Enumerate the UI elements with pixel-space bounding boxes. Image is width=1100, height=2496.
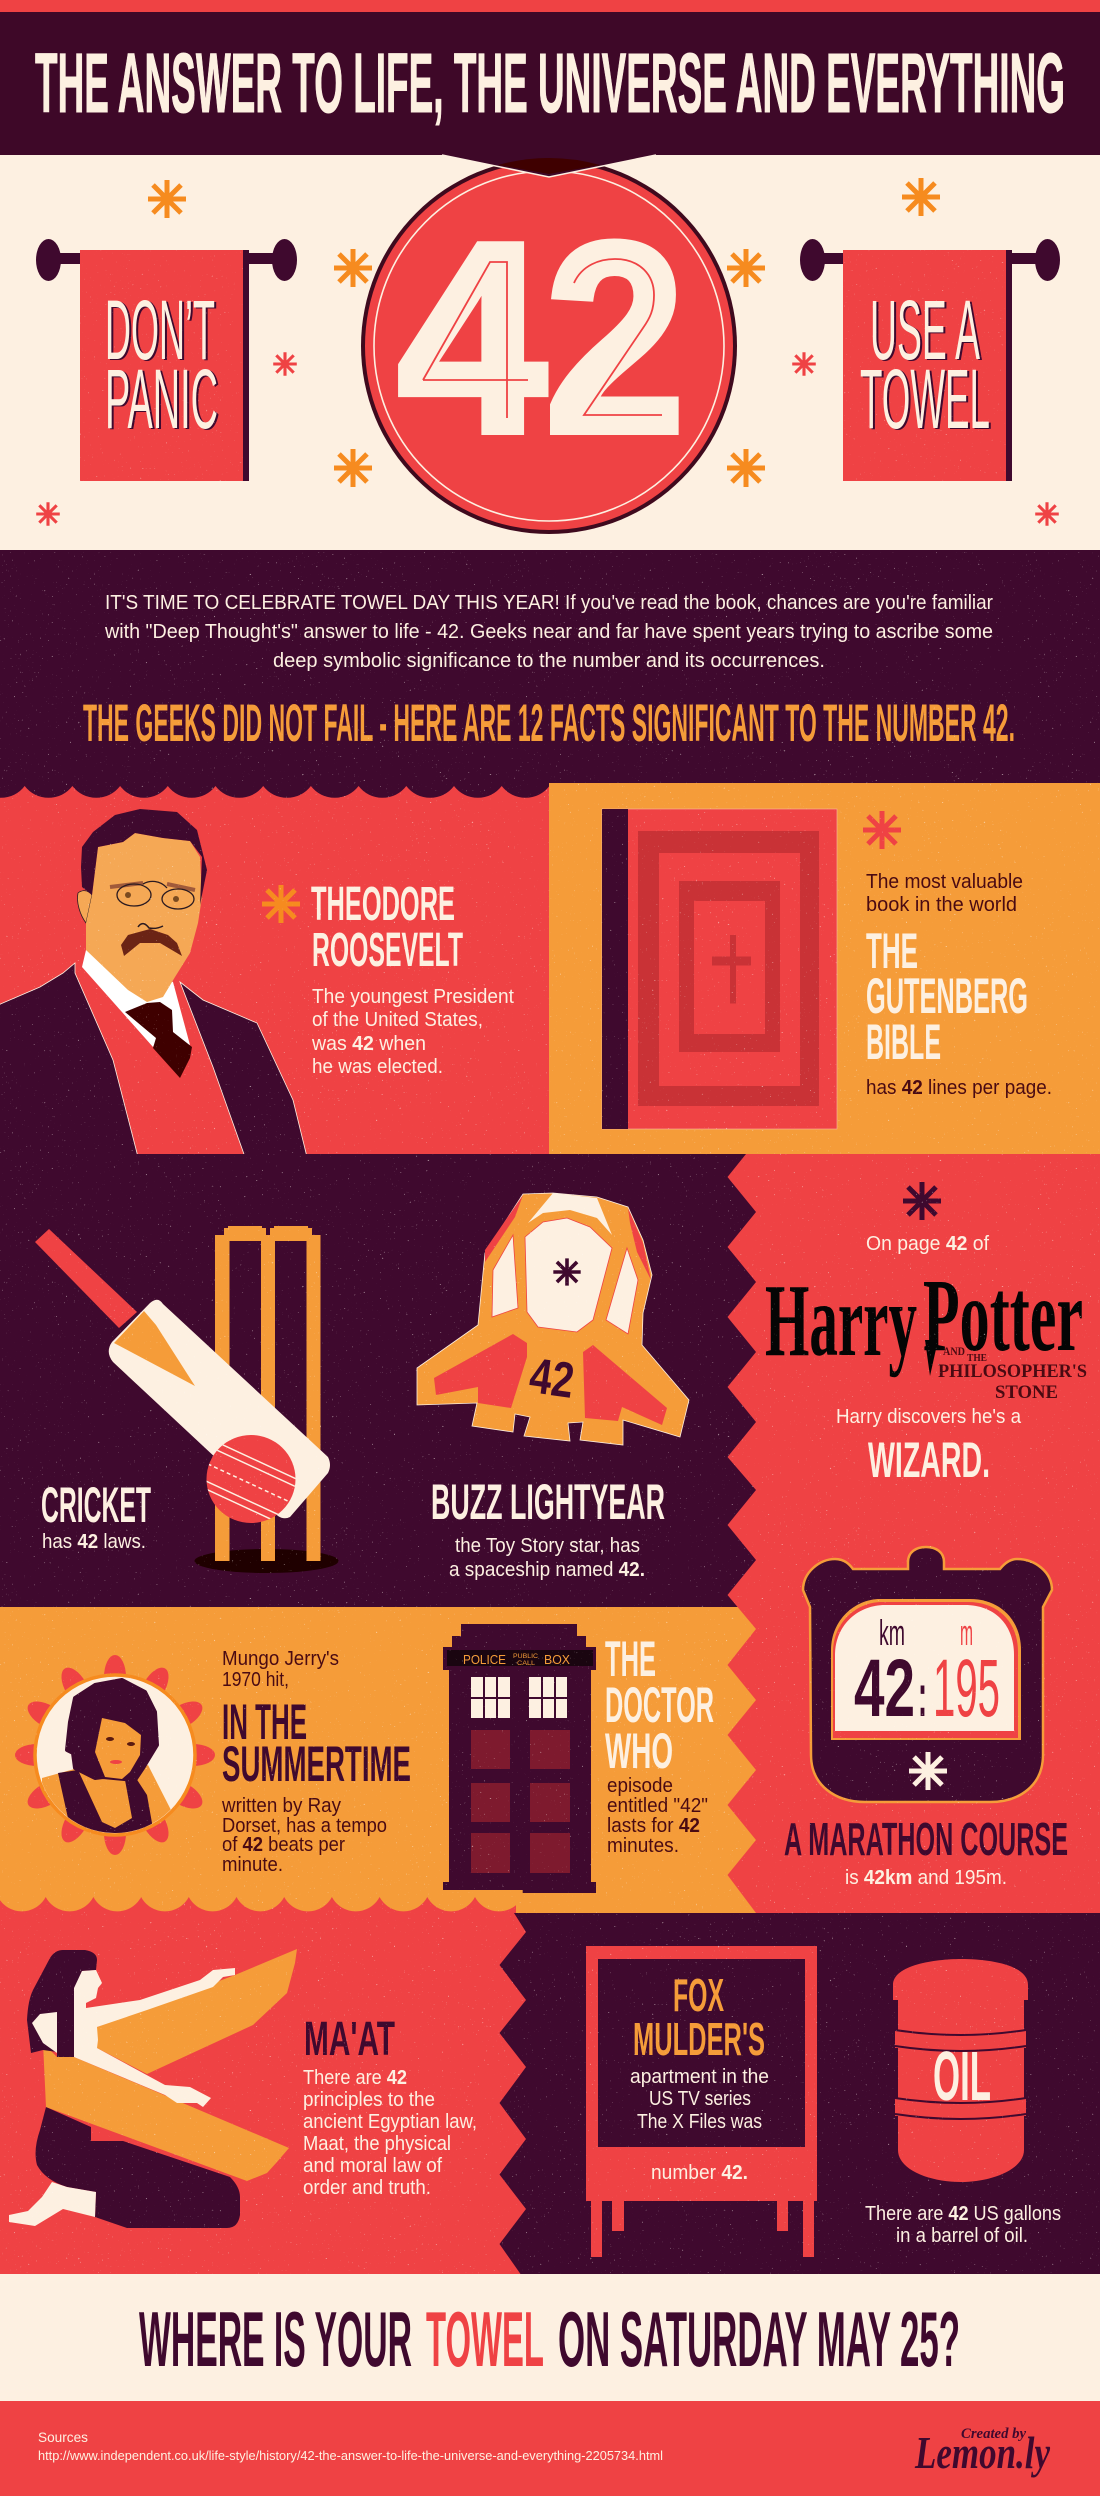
panel: orange band background [0, 1607, 800, 1913]
panel: maat background [0, 1897, 530, 2274]
fact text: BIBLE [866, 1014, 941, 1070]
fact text: Dorset, has a tempo [222, 1815, 387, 1837]
result text [836, 1406, 1022, 1488]
footer [0, 2401, 1100, 2496]
top red stripe [0, 0, 1100, 12]
harry potter logo: Harry [765, 1263, 917, 1378]
circle badge: 42 [361, 158, 737, 534]
result text: Harry discovers he's a [836, 1406, 1022, 1428]
fact text: THE [605, 1631, 656, 1687]
fact text: was 42 when [311, 1033, 426, 1055]
fact text: The youngest President [312, 986, 514, 1008]
orange scalloped edge [0, 1890, 523, 1911]
oil barrel [893, 1959, 1028, 2182]
sources: Sources [38, 2429, 88, 2445]
spaceship illustration [417, 1193, 689, 1445]
tardis: PUBLIC [513, 1654, 539, 1660]
fox mulder sign: MULDER'S [633, 2013, 765, 2065]
marathon [784, 1547, 1068, 1889]
number 42: 2 [545, 188, 685, 489]
portrait medallion [15, 1655, 215, 1855]
panel: intro [0, 550, 1100, 790]
fox mulder sign [586, 1946, 817, 2257]
cricket [35, 1226, 338, 1573]
fact text: has 42 lines per page. [866, 1077, 1052, 1099]
fact text: minutes. [607, 1835, 679, 1857]
fact text: book in the world [866, 894, 1017, 916]
fact text: DOCTOR [605, 1677, 714, 1733]
oil fact [865, 2203, 1061, 2247]
harry potter [765, 1182, 1087, 1488]
title banner [0, 12, 1100, 177]
name [311, 878, 463, 977]
tardis: POLICE [463, 1652, 506, 1667]
icon: asterisk [863, 811, 901, 849]
oil barrel: OIL [933, 2037, 991, 2115]
fact text: THE [866, 923, 918, 979]
harry potter logo: AND [943, 1344, 965, 1358]
harry potter logo: PHILOSOPHER'S [938, 1361, 1087, 1382]
tardis: BOX [544, 1652, 570, 1667]
name: ROOSEVELT [312, 924, 463, 977]
header section background [0, 0, 1100, 550]
maat text: and moral law of [303, 2155, 442, 2177]
towel right: use a towel [800, 239, 1060, 481]
fact text: minute. [222, 1854, 283, 1876]
fox mulder sign: number 42. [651, 2162, 748, 2184]
tardis: CALL [517, 1661, 536, 1667]
logo: lemonly: Lemon.ly [914, 2427, 1050, 2478]
label: BUZZ LIGHTYEAR [431, 1474, 665, 1530]
fox mulder sign: US TV series [649, 2088, 751, 2110]
towel left: don't panic: PANIC [105, 352, 218, 446]
book illustration [602, 809, 837, 1129]
maat text: Maat, the physical [303, 2133, 451, 2155]
towel left: don't panic: DON’T [105, 283, 215, 377]
fact text: written by Ray [221, 1795, 341, 1817]
fact text: lasts for 42 [607, 1815, 700, 1837]
label [431, 1474, 665, 1581]
buzz lightyear [417, 1193, 689, 1581]
label [784, 1813, 1068, 1889]
doctor who [443, 1624, 714, 1893]
panel: fox mulder and oil [500, 1913, 1100, 2274]
towel left: don't panic [36, 239, 297, 481]
fox mulder sign: FOX [673, 1969, 724, 2021]
intro paragraph: IT'S TIME TO CELEBRATE TOWEL DAY THIS YEAR! If you've read the book, chances are you're familiar [105, 592, 993, 614]
fact text [605, 1631, 714, 1857]
closing heading: WHERE IS YOUR [139, 2295, 412, 2383]
harry potter logo: THE [967, 1353, 987, 1364]
fact text [311, 986, 514, 1078]
maat text [303, 2013, 477, 2199]
fact text [866, 871, 1052, 1099]
label: a spaceship named 42. [449, 1559, 645, 1581]
portrait: roosevelt [0, 809, 307, 1157]
fact text: IN THE [222, 1694, 307, 1750]
fact text: SUMMERTIME [222, 1736, 411, 1792]
stopwatch: : [918, 1662, 927, 1729]
number 42 [398, 188, 685, 489]
fact text: he was elected. [312, 1056, 443, 1078]
fact text [221, 1648, 411, 1876]
fact text: of the United States, [312, 1009, 483, 1031]
stopwatch: 195 [933, 1643, 1000, 1734]
fact text: of 42 beats per [222, 1834, 345, 1856]
fact text: 1970 hit, [222, 1669, 289, 1691]
harry potter logo [765, 1258, 1087, 1403]
number 42: 4 [398, 188, 548, 489]
fact text: Mungo Jerry's [222, 1648, 339, 1670]
maat text: MA'AT [304, 2013, 395, 2066]
intro paragraph [104, 592, 993, 672]
closing heading: TOWEL [426, 2295, 544, 2383]
towel text [860, 283, 990, 446]
label: is 42km and 195m. [845, 1867, 1007, 1889]
harry potter logo: STONE [995, 1382, 1058, 1403]
decorative asterisks [36, 178, 1059, 526]
tardis [443, 1624, 596, 1893]
maat text: order and truth. [303, 2177, 431, 2199]
fact text: episode [607, 1775, 673, 1797]
icon: asterisk [262, 885, 300, 923]
intro paragraph: deep symbolic significance to the number and its occurrences. [273, 650, 825, 672]
in the summertime [15, 1648, 411, 1876]
maat text: There are 42 [303, 2067, 407, 2089]
logo: lemonly: Created by [961, 2426, 1026, 2442]
fact text: The most valuable [866, 871, 1023, 893]
spaceship illustration: 42 [526, 1347, 578, 1409]
label: the Toy Story star, has [455, 1535, 640, 1557]
oil fact: in a barrel of oil. [896, 2225, 1028, 2247]
maat figure [9, 1949, 297, 2228]
stopwatch: m [960, 1612, 973, 1653]
stopwatch: km [879, 1612, 905, 1653]
panel: theodore roosevelt [0, 780, 549, 1157]
icon: asterisk [903, 1182, 941, 1220]
cricket: CRICKET [41, 1477, 151, 1533]
panel: dark middle background [0, 1154, 1100, 1607]
stopwatch [803, 1547, 1052, 1802]
name: THEODORE [311, 878, 455, 931]
closing banner [0, 2274, 1100, 2401]
maat text: principles to the [303, 2089, 435, 2111]
oil fact: There are 42 US gallons [865, 2203, 1061, 2225]
stopwatch: 42 [854, 1643, 915, 1734]
fact text: WHO [605, 1723, 673, 1779]
towel text [105, 283, 218, 446]
fact text: entitled "42" [607, 1795, 708, 1817]
label: has 42 laws. [42, 1531, 146, 1553]
sources [38, 2429, 663, 2463]
panel: right red zigzag column [728, 1154, 1100, 1913]
lead text: On page 42 of [866, 1233, 989, 1255]
sources: http://www.independent.co.uk/life-style/history/42-the-answer-to-life-the-universe-and-everything-2205734.html [38, 2448, 663, 2463]
fox mulder sign: apartment in the [630, 2066, 769, 2088]
cricket stumps and bat [35, 1226, 338, 1573]
maat text: ancient Egyptian law, [303, 2111, 477, 2133]
speckle texture [0, 552, 1100, 2496]
intro paragraph: with "Deep Thought's" answer to life - 42. Geeks near and far have spent years trying to ascribe some [104, 621, 993, 643]
panel: gutenberg bible [549, 783, 1100, 1154]
label [41, 1477, 151, 1553]
fox mulder sign: The X Files was [637, 2111, 762, 2133]
result text: WIZARD. [868, 1432, 990, 1488]
